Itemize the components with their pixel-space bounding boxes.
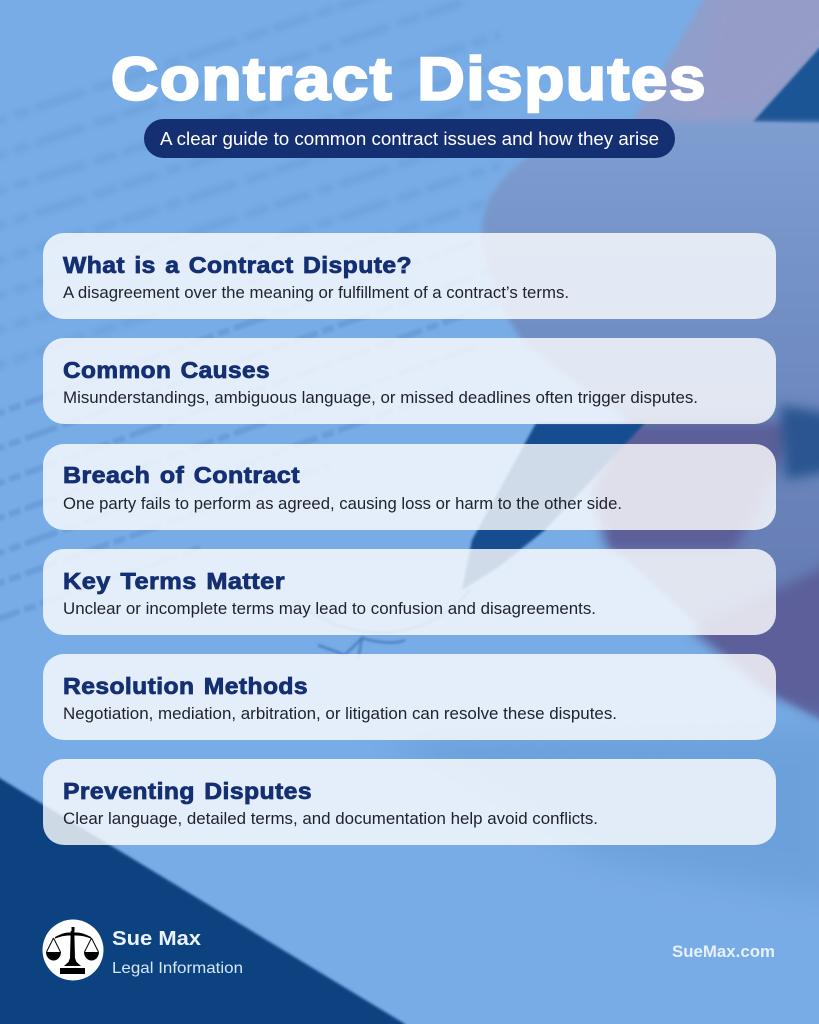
panel: what is a contract dispute: A disagreement over the meaning or fulfillment of a contract’s terms.	[63, 284, 569, 302]
subtitle pill: A clear guide to common contract issues and how they arise	[160, 128, 659, 149]
panel: breach of contract: Breach of Contract	[63, 462, 300, 488]
panel: key terms matter: Unclear or incomplete terms may lead to confusion and disagreements.	[63, 600, 596, 618]
panel: key terms matter: Key Terms Matter	[63, 568, 285, 594]
panel: preventing disputes: Preventing Disputes	[63, 778, 312, 804]
palm	[482, 122, 819, 730]
top right finger	[625, 0, 819, 135]
panel: preventing disputes	[43, 759, 776, 845]
panel: common causes	[43, 338, 776, 424]
panel: resolution methods	[43, 654, 776, 740]
panel: key terms matter	[43, 549, 776, 635]
panel: what is a contract dispute: What is a Contract Dispute?	[63, 252, 412, 278]
lower paper shading	[380, 725, 819, 900]
panel: resolution methods: Negotiation, mediation, arbitration, or litigation can resolve these disputes.	[63, 705, 617, 723]
dark paper corner	[0, 754, 405, 1024]
brand tagline: Legal Information	[112, 960, 243, 977]
panel: common causes: Common Causes	[63, 357, 270, 383]
panel: breach of contract	[43, 444, 776, 530]
title: Contract Disputes	[111, 46, 707, 112]
sharper document lines, lower left	[0, 225, 520, 620]
panel: common causes: Misunderstandings, ambiguous language, or missed deadlines often trigger disputes.	[63, 389, 698, 407]
blurred document lines, upper area	[0, 0, 500, 375]
signature strokes	[295, 590, 470, 660]
panel: breach of contract: One party fails to perform as agreed, causing loss or harm to the other side.	[63, 495, 622, 513]
icon: scales of justice logo	[42, 920, 104, 980]
panel: preventing disputes: Clear language, detailed terms, and documentation help avoid conflicts.	[63, 810, 598, 828]
panel: what is a contract dispute	[43, 233, 776, 319]
website: SueMax.com	[672, 943, 775, 961]
brand name: Sue Max	[112, 928, 201, 950]
panel: resolution methods: Resolution Methods	[63, 673, 308, 699]
subtitle pill	[144, 119, 675, 158]
pen body and nib	[462, 423, 645, 590]
darker fingers	[592, 422, 800, 550]
